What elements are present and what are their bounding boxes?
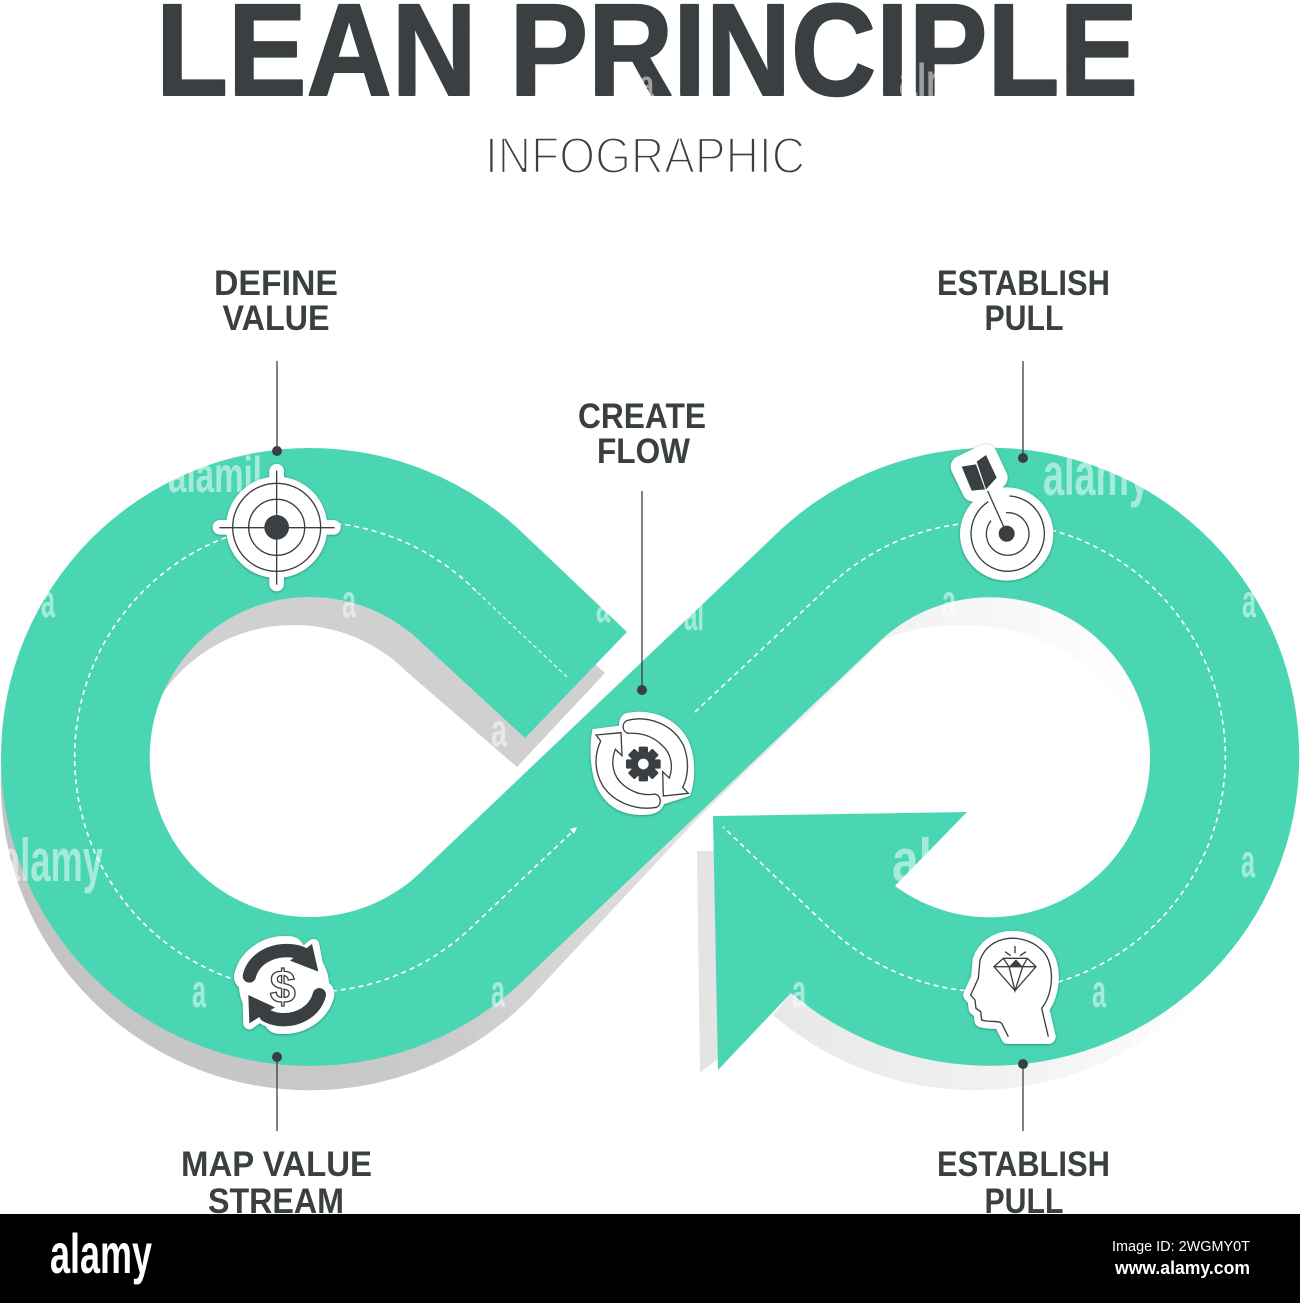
watermarks: alm bbox=[899, 54, 955, 106]
label: establish pull top: ESTABLISH bbox=[937, 264, 1110, 303]
watermarks: a bbox=[639, 64, 655, 106]
watermarks: a bbox=[1241, 835, 1255, 887]
shadow: left loop outer bbox=[1, 700, 800, 1090]
label: establish pull bottom: ESTABLISH bbox=[937, 1145, 1110, 1184]
label: create flow: FLOW bbox=[597, 432, 690, 471]
shadow: arrowhead bbox=[697, 851, 719, 1073]
label: define value: VALUE bbox=[222, 299, 330, 338]
label: define value bbox=[214, 264, 338, 338]
leader: create flow bbox=[637, 491, 647, 695]
label: map value stream: STREAM bbox=[208, 1182, 344, 1221]
watermarks: alamy bbox=[1043, 441, 1150, 508]
watermarks: a bbox=[342, 575, 356, 627]
watermarks: a bbox=[1242, 575, 1256, 627]
watermarks: al bbox=[684, 588, 704, 640]
watermarks: al bbox=[892, 827, 932, 894]
leader: map value stream bbox=[272, 1052, 282, 1131]
footer bar: www.alamy.com bbox=[1114, 1258, 1250, 1278]
footer bar: alamy bbox=[50, 1222, 152, 1285]
label: create flow: CREATE bbox=[578, 397, 706, 436]
icon: arrow in bullseye bbox=[960, 455, 1053, 581]
icon: dollar with cycle arrows bbox=[239, 940, 329, 1030]
infinity arrow band bbox=[1, 448, 1299, 1070]
watermarks bbox=[0, 54, 1256, 1017]
leader: establish pull bottom bbox=[1018, 1059, 1028, 1131]
shadow: right loop outer bbox=[773, 900, 1200, 1090]
footer bar: Image ID: 2WGMY0T bbox=[1112, 1238, 1250, 1255]
icon: gear with cycle arrows bbox=[592, 713, 693, 814]
leader: define value bbox=[272, 361, 282, 456]
shadow: left loop inner and arm end bbox=[140, 560, 627, 767]
dashed path: left loop bbox=[75, 522, 1225, 992]
watermarks: a bbox=[491, 965, 505, 1017]
label: map value stream bbox=[181, 1145, 372, 1221]
watermarks: a bbox=[1092, 965, 1106, 1017]
label: create flow bbox=[578, 397, 706, 471]
footer bar bbox=[0, 1214, 1300, 1303]
watermarks: alamil bbox=[168, 447, 262, 503]
icon: head with diamond bbox=[971, 938, 1051, 1037]
label: establish pull top: PULL bbox=[984, 299, 1064, 338]
label: establish pull top bbox=[937, 264, 1110, 338]
label: establish pull bottom bbox=[937, 1145, 1110, 1221]
watermarks: alamy bbox=[0, 827, 103, 894]
watermarks: a bbox=[792, 965, 806, 1017]
subtitle: INFOGRAPHIC bbox=[485, 127, 805, 184]
label: map value stream: MAP VALUE bbox=[181, 1145, 372, 1184]
icon: crosshair target bbox=[213, 464, 341, 591]
watermarks: a bbox=[596, 580, 610, 632]
icon: dollar with cycle arrows: $ bbox=[270, 960, 296, 1012]
leader: establish pull top bbox=[1018, 361, 1028, 463]
shadow: right loop inner bbox=[800, 560, 1165, 770]
watermarks: a bbox=[491, 704, 507, 756]
watermarks: a bbox=[942, 575, 956, 627]
label: establish pull bottom: PULL bbox=[984, 1182, 1064, 1221]
watermarks: a bbox=[192, 965, 206, 1017]
label: define value: DEFINE bbox=[214, 264, 338, 303]
watermarks: a bbox=[41, 575, 55, 627]
